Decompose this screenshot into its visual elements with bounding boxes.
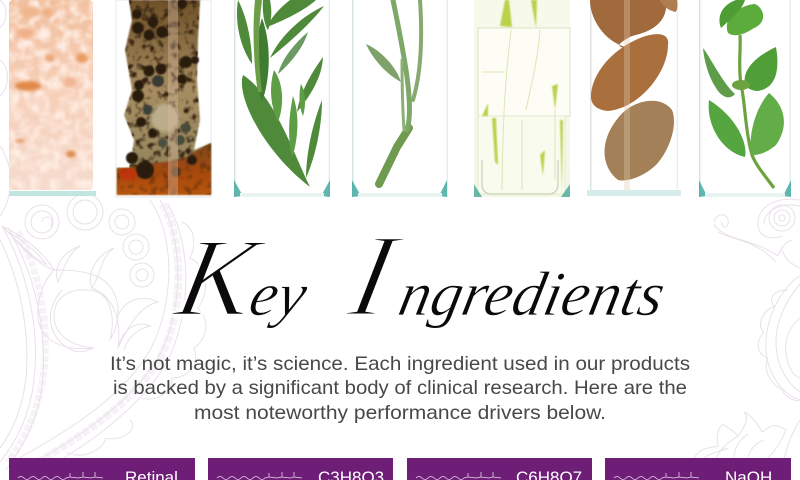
- jar: mint: [699, 0, 791, 197]
- jar: rosemary: [234, 0, 330, 197]
- jar: almonds: [587, 0, 681, 196]
- intro text block: is backed by a significant body of clinical research. Here are the: [113, 377, 687, 399]
- intro text block: [110, 353, 690, 424]
- jar: pink salt: [9, 0, 96, 196]
- title: Key Ingredients: I: [339, 210, 412, 341]
- intro text block: most noteworthy performance drivers below.: [194, 402, 606, 424]
- right lace ornament: [694, 199, 800, 460]
- title: Key Ingredients: ngredients: [393, 259, 672, 329]
- title: Key Ingredients: ey: [244, 260, 314, 329]
- jar: green stems: [352, 0, 448, 197]
- molecule line: Retinal: [18, 472, 103, 480]
- tab: NaOH: [605, 458, 791, 480]
- jar: honeycomb: [116, 0, 211, 197]
- tab: Retinal: [9, 458, 195, 480]
- intro text block: It’s not magic, it’s science. Each ingredient used in our products: [110, 353, 690, 375]
- molecule line: NaOH: [614, 472, 699, 480]
- molecule line: C3H8O3: [217, 472, 302, 480]
- tab: C6H8O7: [407, 458, 592, 480]
- title: Key Ingredients: K: [165, 216, 273, 340]
- tab: C3H8O3: [208, 458, 393, 480]
- jar: aloe: [474, 0, 570, 197]
- left lace ornament: [0, 0, 206, 476]
- photo strip: seven ingredient jars: [9, 0, 791, 197]
- molecule line: C6H8O7: [416, 472, 501, 480]
